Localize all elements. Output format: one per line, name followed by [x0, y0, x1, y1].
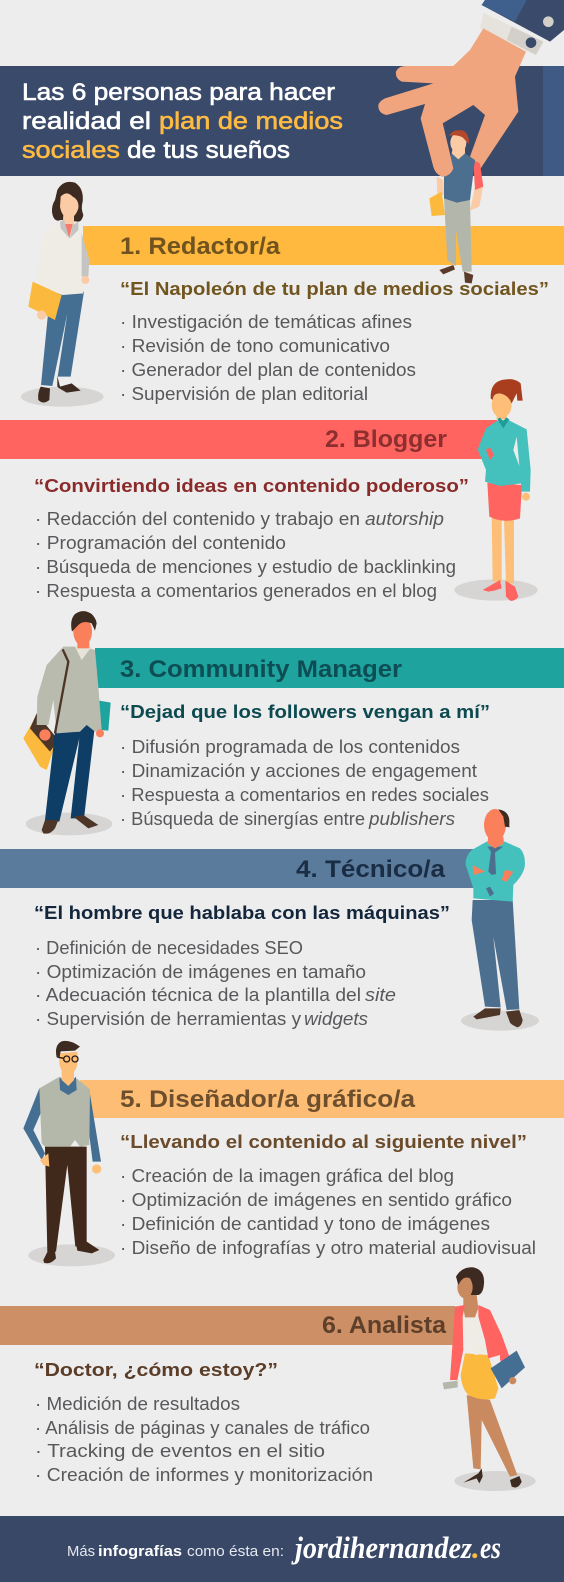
list: disenador tasks	[120, 1166, 536, 1258]
list: tecnico tasks: · Supervisión de herramientas y	[35, 1009, 301, 1029]
list: community manager tasks: · Búsqueda de sinergías entre	[120, 809, 365, 829]
footer text: como ésta en:	[187, 1543, 284, 1560]
quote: blogger: “Convirtiendo ideas en contenido poderoso”	[34, 476, 469, 496]
list: community manager tasks: publishers	[368, 809, 455, 829]
list: tecnico tasks: widgets	[304, 1009, 368, 1029]
heading: realidad el	[22, 108, 151, 135]
list: community manager tasks	[120, 737, 489, 829]
list: blogger tasks	[35, 509, 456, 601]
bar: section 4	[0, 849, 475, 888]
list: blogger tasks: · Búsqueda de menciones y estudio de backlinking	[35, 557, 456, 577]
list: analista tasks: · Tracking de eventos en el sitio	[35, 1441, 325, 1461]
quote: tecnico: “El hombre que hablaba con las máquinas”	[34, 903, 450, 923]
figure: community manager	[23, 611, 112, 835]
list: disenador tasks: · Diseño de infografías y otro material audiovisual	[120, 1238, 536, 1258]
panel: footer	[0, 1516, 564, 1582]
hand and sleeve	[378, 0, 564, 177]
list: analista tasks: · Creación de informes y monitorización	[35, 1465, 373, 1485]
list: analista tasks: · Medición de resultados	[35, 1394, 240, 1414]
section 6 text	[34, 1312, 447, 1485]
list: analista tasks: · Análisis de páginas y canales de tráfico	[35, 1418, 370, 1438]
heading: Las 6 personas para hacer	[22, 79, 335, 106]
list: analista tasks	[35, 1394, 373, 1485]
logo: jordihernandez.es: es	[480, 1530, 501, 1565]
footer text: infografías	[98, 1543, 182, 1560]
logo: jordihernandez.es: jordihernandez	[290, 1530, 472, 1565]
bar: section 3	[95, 648, 564, 688]
list: blogger tasks: autorship	[365, 509, 444, 529]
bar: section 2	[0, 420, 497, 459]
list: community manager tasks: · Respuesta a comentarios en redes sociales	[120, 785, 489, 805]
finger in front of person	[421, 118, 453, 177]
heading: de tus sueños	[127, 137, 290, 164]
figure: disenador	[23, 1041, 115, 1266]
list: tecnico tasks: · Definición de necesidades SEO	[35, 938, 303, 958]
list: disenador tasks: · Optimización de imágenes en sentido gráfico	[120, 1190, 512, 1210]
list: disenador tasks: · Creación de la imagen gráfica del blog	[120, 1166, 454, 1186]
heading	[22, 79, 343, 164]
heading: plan de medios	[159, 108, 343, 135]
figure: tecnico	[461, 809, 539, 1031]
bar: section 5	[80, 1080, 564, 1118]
icon: hand holding a person	[378, 0, 564, 283]
list: tecnico tasks: · Optimización de imágenes en tamaño	[35, 962, 366, 982]
heading: analista: 6. Analista	[322, 1312, 447, 1339]
small person	[429, 130, 483, 283]
heading: blogger: 2. Blogger	[325, 426, 447, 453]
list: community manager tasks: · Dinamización y acciones de engagement	[120, 761, 477, 781]
list: tecnico tasks: · Adecuación técnica de la plantilla del	[35, 985, 361, 1005]
figure: analista	[443, 1267, 536, 1491]
section 4 text	[34, 856, 450, 1029]
quote: analista: “Doctor, ¿cómo estoy?”	[34, 1360, 278, 1380]
section 1 text	[120, 233, 549, 404]
figure: blogger	[454, 379, 538, 601]
list: tecnico tasks: site	[365, 985, 396, 1005]
list: redactor tasks	[120, 312, 416, 404]
footer text	[67, 1543, 284, 1560]
panel: header banner	[0, 66, 564, 176]
list: disenador tasks: · Definición de cantidad y tono de imágenes	[120, 1214, 490, 1234]
list: blogger tasks: · Redacción del contenido y trabajo en	[35, 509, 360, 529]
quote: community manager: “Dejad que los followers vengan a mí”	[120, 702, 490, 722]
bar: section 6	[0, 1306, 455, 1345]
heading: disenador: 5. Diseñador/a gráfico/a	[120, 1086, 416, 1113]
heading: sociales	[22, 137, 120, 164]
list: redactor tasks: · Supervisión de plan editorial	[120, 384, 368, 404]
section 5 text	[120, 1086, 536, 1258]
heading: redactor: 1. Redactor/a	[120, 233, 281, 260]
list: tecnico tasks	[35, 938, 396, 1029]
list: blogger tasks: · Programación del contenido	[35, 533, 286, 553]
quote: redactor: “El Napoleón de tu plan de medios sociales”	[120, 279, 549, 299]
section 3 text	[120, 656, 490, 829]
list: redactor tasks: · Generador del plan de contenidos	[120, 360, 416, 380]
figure: redactora	[21, 182, 104, 407]
heading: tecnico: 4. Técnico/a	[296, 856, 446, 883]
footer text: Más	[67, 1543, 95, 1560]
section 2 text	[34, 426, 469, 601]
list: redactor tasks: · Investigación de temáticas afines	[120, 312, 412, 332]
bar: section 1	[83, 226, 564, 265]
logo: jordihernandez.es: .	[472, 1530, 480, 1565]
list: redactor tasks: · Revisión de tono comunicativo	[120, 336, 390, 356]
list: blogger tasks: · Respuesta a comentarios generados en el blog	[35, 581, 437, 601]
quote: disenador: “Llevando el contenido al siguiente nivel”	[120, 1132, 527, 1152]
list: community manager tasks: · Difusión programada de los contenidos	[120, 737, 460, 757]
heading: community manager: 3. Community Manager	[120, 656, 402, 683]
